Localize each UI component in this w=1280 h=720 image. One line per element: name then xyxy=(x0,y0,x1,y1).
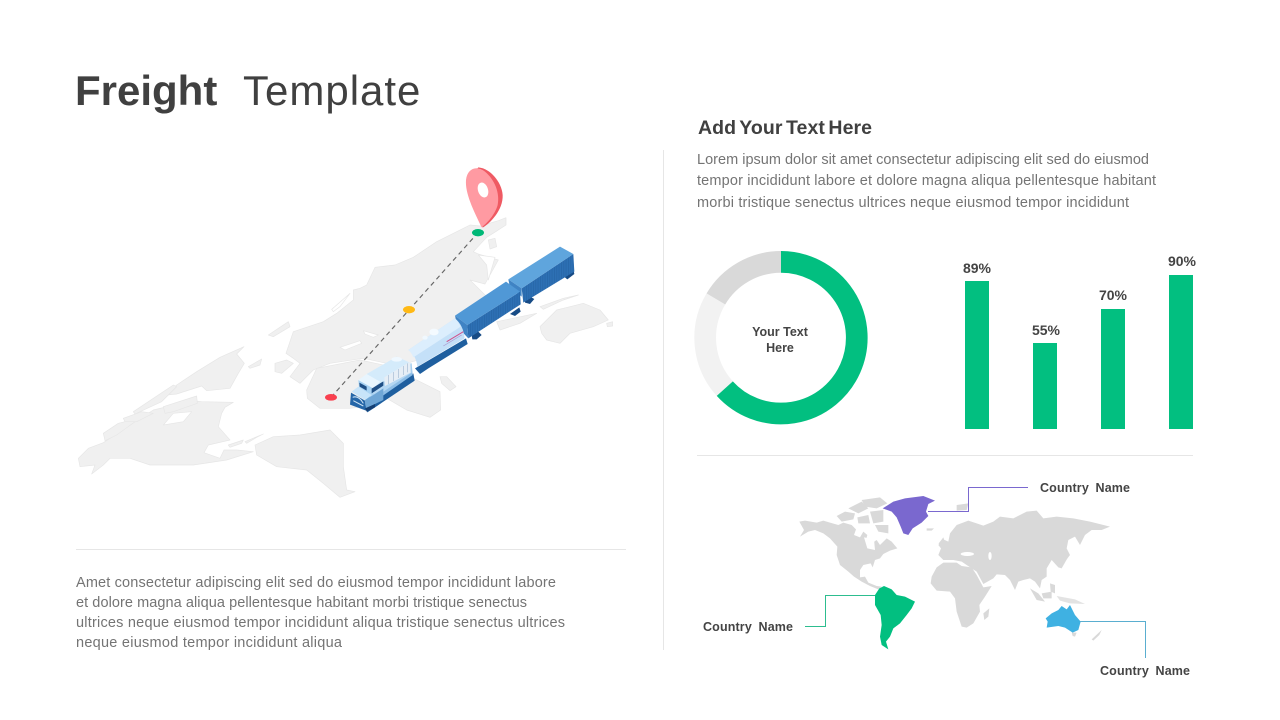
right body text: tempor incididunt labore et dolore magna aliqua pellentesque habitant xyxy=(697,173,1156,189)
donut centre label: Here xyxy=(766,341,794,355)
callout: South America xyxy=(703,596,875,634)
right body text: morbi tristique senectus ultrices neque eiusmod tempor incididunt xyxy=(697,195,1129,211)
bar 55%: 55% xyxy=(1032,322,1061,338)
green destination marker xyxy=(472,229,484,236)
left body text: et dolore magna aliqua pellentesque habitant morbi tristique senectus xyxy=(76,595,527,611)
section heading: Add Your Text Here xyxy=(698,117,872,139)
map: grey continents xyxy=(799,497,1110,641)
front container xyxy=(455,282,521,339)
map: South America highlight xyxy=(875,586,915,649)
title: Freight xyxy=(75,67,217,114)
left body text xyxy=(76,575,565,651)
bar 70%: 70% xyxy=(1099,287,1128,303)
yellow waypoint marker xyxy=(403,306,415,313)
map: Greenland highlight xyxy=(883,496,935,535)
right body text xyxy=(697,152,1156,211)
dashed route xyxy=(331,233,478,397)
flat world map xyxy=(799,496,1110,649)
bar 90%: 90% xyxy=(1168,253,1197,269)
bar 89% xyxy=(963,260,992,429)
callout: Australia: Country Name xyxy=(1100,664,1190,678)
left body text: Amet consectetur adipiscing elit sed do eiusmod tempor incididunt labore xyxy=(76,575,556,591)
donut chart xyxy=(705,262,857,414)
map: Australia highlight xyxy=(1046,605,1081,633)
donut centre label: Your Text xyxy=(752,325,809,339)
callout: Australia xyxy=(1080,622,1190,678)
locomotive xyxy=(350,357,415,412)
title: Template xyxy=(243,67,421,114)
left body text: ultrices neque eiusmod tempor incididunt aliqua tristique senectus ultrices xyxy=(76,615,565,631)
red origin marker xyxy=(325,394,337,401)
callout: South America: Country Name xyxy=(703,620,793,634)
tank wagon xyxy=(408,318,468,374)
map: eurasia, africa, australia xyxy=(268,218,613,417)
bar 89%: 89% xyxy=(963,260,992,276)
bar 70% xyxy=(1099,287,1128,429)
bar 55% xyxy=(1032,322,1061,429)
bar chart xyxy=(963,253,1197,429)
map: americas xyxy=(78,347,355,497)
rear container xyxy=(508,247,574,304)
bar 90% xyxy=(1168,253,1197,429)
callout: Greenland: Country Name xyxy=(1040,481,1130,495)
location pin xyxy=(466,167,503,228)
left body text: neque eiusmod tempor incididunt aliqua xyxy=(76,635,343,651)
callout: Greenland xyxy=(928,481,1130,512)
right body text: Lorem ipsum dolor sit amet consectetur adipiscing elit sed do eiusmod xyxy=(697,152,1149,168)
isometric world map xyxy=(78,218,613,497)
